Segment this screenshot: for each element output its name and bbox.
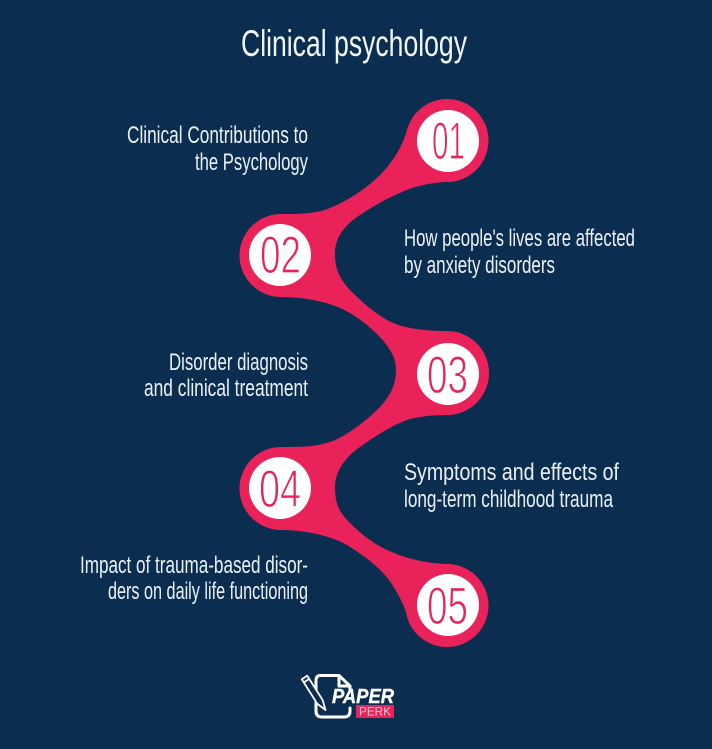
text block: step 04: long-term childhood trauma (404, 486, 613, 513)
text block: step 04: Symptoms and effects of (404, 459, 619, 486)
text block: step 01: the Psychology (195, 149, 308, 176)
text block: step 04 (404, 459, 619, 513)
text block: step 01: Clinical Contributions to (127, 122, 308, 149)
logo: Paper Perk (302, 676, 395, 718)
step 01 (417, 110, 479, 172)
logo badge: PERK: PERK (359, 704, 391, 718)
icon: pencil (302, 676, 326, 710)
step 05: 05 (427, 577, 468, 636)
icon: document page (316, 676, 350, 717)
step 03: 03 (427, 346, 468, 405)
title: Clinical psychology (241, 23, 467, 64)
winding ribbon connecting the five steps (240, 99, 489, 647)
step 04: 04 (259, 460, 301, 519)
text block: step 05 (80, 552, 308, 605)
text block: step 03: Disorder diagnosis (169, 349, 308, 376)
step 02 (249, 224, 311, 286)
text block: step 05: Impact of trauma-based disor- (80, 552, 308, 579)
text block: step 01 (127, 122, 308, 176)
logo word: PAPER: PAPER (332, 686, 395, 708)
text block: step 03 (144, 349, 308, 402)
step 01: 01 (432, 112, 465, 171)
text block: step 03: and clinical treatment (144, 375, 308, 402)
step 02: 02 (260, 226, 301, 285)
text block: step 05: ders on daily life functioning (108, 578, 308, 605)
text block: step 02: by anxiety disorders (404, 252, 555, 279)
text block: step 02 (404, 225, 635, 279)
